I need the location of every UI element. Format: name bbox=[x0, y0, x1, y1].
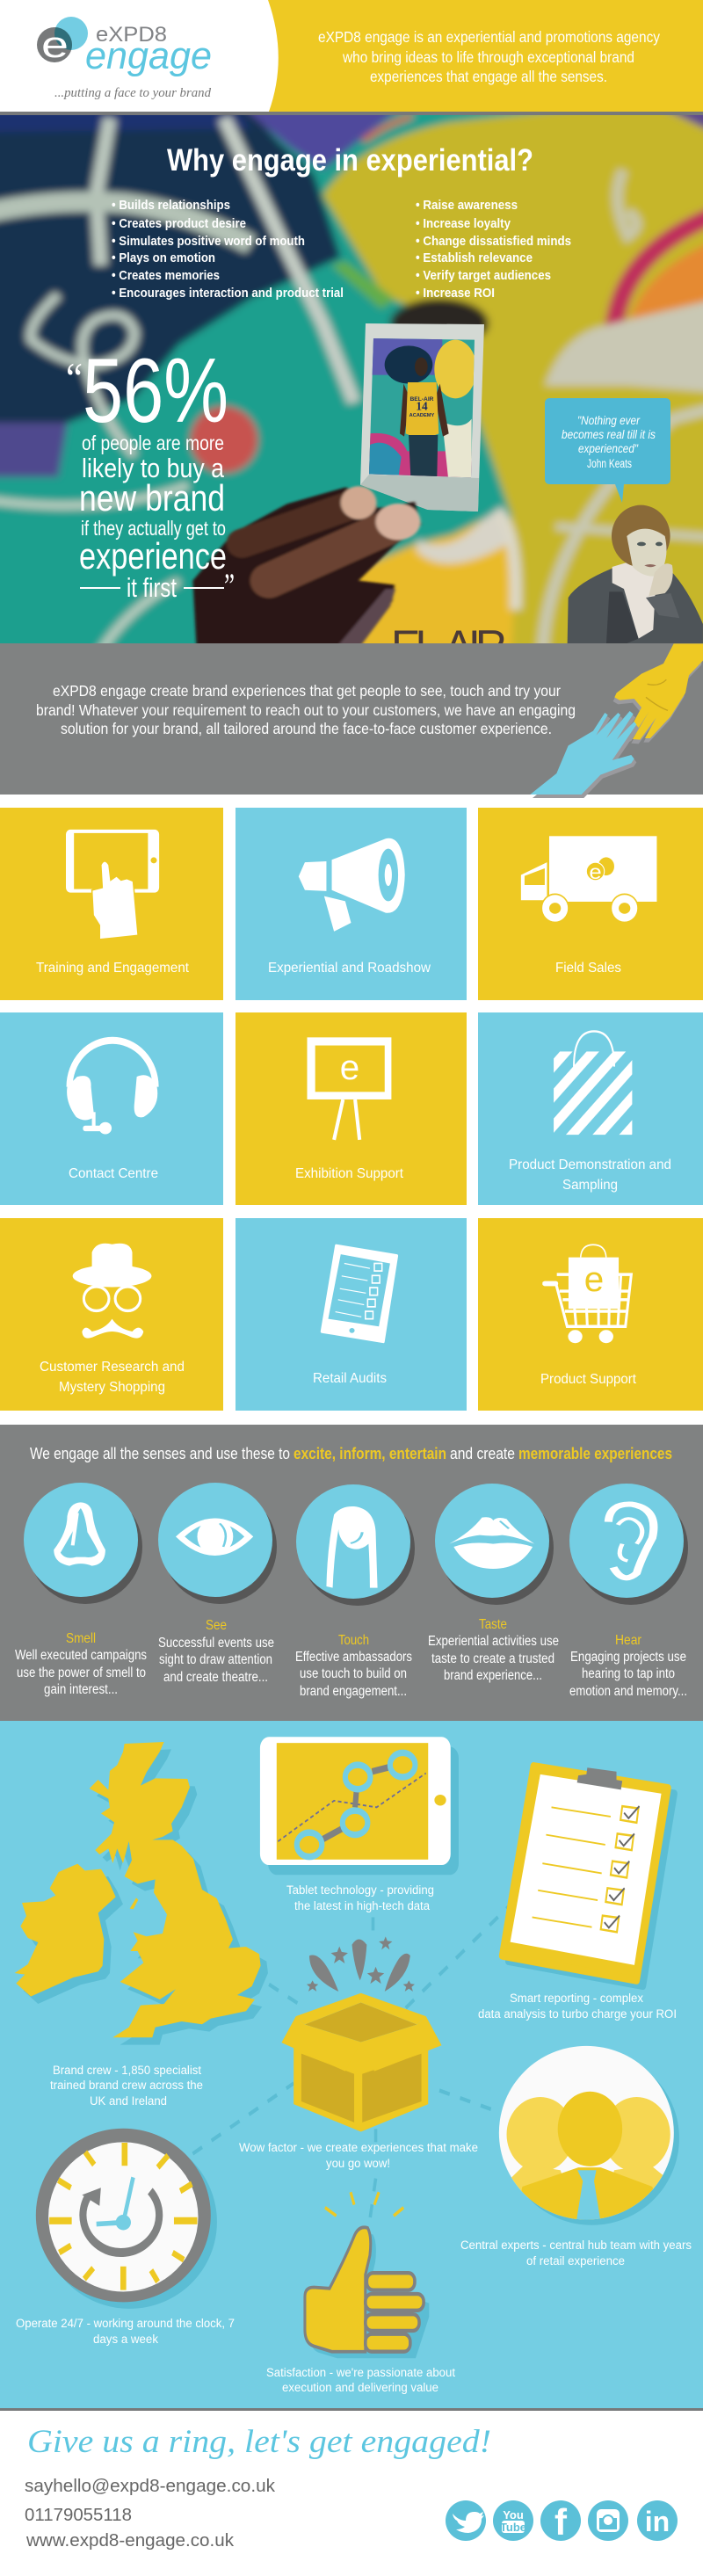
56 percent statistic: of people are more bbox=[82, 432, 224, 454]
bullet list: left bbox=[112, 198, 344, 301]
speech bubble: John Keats quote bbox=[545, 398, 670, 503]
sense: smell: use the power of smell to bbox=[17, 1665, 146, 1680]
panel: retail audits bbox=[236, 1218, 467, 1411]
sense: taste: Taste bbox=[479, 1617, 507, 1632]
icon: tablet with data chart bbox=[260, 1737, 459, 1875]
hand holding polaroid bbox=[192, 486, 422, 664]
intro paragraph: solution for your brand, all tailored around the face-to-face customer experience. bbox=[61, 720, 552, 737]
sense: see: See bbox=[206, 1618, 227, 1633]
capabilities panel background bbox=[0, 1721, 703, 2411]
wow factor caption bbox=[239, 2141, 478, 2170]
central experts caption: of retail experience bbox=[526, 2254, 625, 2268]
brand crew caption: trained brand crew across the bbox=[50, 2079, 203, 2092]
sense: hear bbox=[569, 1484, 688, 1699]
icon: central experts team bbox=[499, 2046, 679, 2225]
icon: presentation board: e bbox=[340, 1049, 359, 1088]
panel: product demonstration and sampling bbox=[478, 1012, 703, 1205]
panel: product demonstration and sampling: Product Demonstration and bbox=[509, 1157, 671, 1172]
icon: lips bbox=[449, 1517, 534, 1569]
icon: youtube bbox=[493, 2500, 533, 2541]
senses heading: and create bbox=[450, 1444, 515, 1462]
panel: customer research and mystery shopping: Mystery Shopping bbox=[59, 1380, 165, 1395]
central experts caption: Central experts - central hub team with years bbox=[460, 2239, 692, 2252]
sense: smell: Well executed campaigns bbox=[15, 1648, 147, 1663]
sense: see: and create theatre... bbox=[163, 1670, 268, 1685]
brand crew caption bbox=[50, 2064, 203, 2108]
icon: UK and Ireland map bbox=[15, 1742, 268, 2045]
icon: nose bbox=[54, 1502, 105, 1566]
icon: facebook bbox=[540, 2500, 581, 2543]
panel: training and engagement bbox=[0, 808, 223, 1000]
panel: experiential and roadshow bbox=[236, 808, 467, 1000]
bullet list: left: • Creates memories bbox=[112, 268, 220, 283]
speech bubble: John Keats quote: John Keats bbox=[587, 457, 632, 470]
connecting dashes bbox=[192, 1906, 509, 2220]
speech bubble: John Keats quote: "Nothing ever bbox=[577, 414, 640, 427]
sense: touch: brand engagement... bbox=[300, 1684, 407, 1699]
satisfaction caption: execution and delivering value bbox=[282, 2381, 438, 2394]
sense: smell: gain interest... bbox=[44, 1682, 118, 1697]
icon: 24/7 clock bbox=[36, 2129, 217, 2309]
sense: see: Successful events use bbox=[158, 1636, 274, 1651]
tablet caption: the latest in high-tech data bbox=[294, 1899, 430, 1912]
bullet list: left: • Creates product desire bbox=[112, 216, 246, 231]
header intro text bbox=[318, 28, 660, 85]
panel: contact centre bbox=[0, 1012, 223, 1205]
icon: megaphone bbox=[299, 838, 405, 932]
Keats portrait bbox=[568, 505, 703, 643]
intro paragraph: eXPD8 engage create brand experiences that get people to see, touch and try your bbox=[53, 682, 561, 700]
header intro text: who bring ideas to life through exceptional brand bbox=[342, 48, 634, 66]
sense: touch: use touch to build on bbox=[300, 1666, 407, 1681]
56 percent statistic: if they actually get to bbox=[81, 517, 226, 540]
senses heading: memorable experiences bbox=[518, 1444, 672, 1462]
56 percent statistic: 56% bbox=[83, 340, 228, 442]
wow factor caption: Wow factor - we create experiences that make bbox=[239, 2141, 478, 2154]
smart reporting caption bbox=[478, 1992, 677, 2021]
panel: training and engagement: Training and Engagement bbox=[36, 961, 190, 976]
call to action heading: Give us a ring, let's get engaged! bbox=[27, 2424, 491, 2460]
header intro text: experiences that engage all the senses. bbox=[370, 68, 607, 85]
56 percent statistic bbox=[66, 340, 235, 606]
sense: taste: taste to create a trusted bbox=[431, 1651, 554, 1666]
smart reporting caption: data analysis to turbo charge your ROI bbox=[478, 2007, 677, 2021]
senses heading: excite, inform, entertain bbox=[294, 1444, 446, 1462]
icon: ear bbox=[608, 1505, 654, 1578]
sense: taste: Experiential activities use bbox=[428, 1634, 559, 1649]
panel: exhibition support bbox=[236, 1012, 467, 1205]
panel: contact centre: Contact Centre bbox=[69, 1166, 158, 1181]
sense: smell: Smell bbox=[66, 1631, 96, 1646]
logo bbox=[37, 17, 212, 100]
panel: field sales bbox=[478, 808, 703, 1000]
panel: customer research and mystery shopping: Customer Research and bbox=[40, 1360, 185, 1375]
operate 24/7 caption: days a week bbox=[93, 2333, 158, 2346]
bullet list: right: • Increase loyalty bbox=[416, 216, 511, 231]
bullet list: left: • Plays on emotion bbox=[112, 250, 215, 265]
header intro text: eXPD8 engage is an experiential and promotions agency bbox=[318, 28, 660, 46]
icon: reaching hands bbox=[530, 643, 703, 798]
sense: hear: Engaging projects use bbox=[570, 1650, 686, 1665]
56 percent statistic: new brand bbox=[79, 477, 225, 519]
icon: fingertip bbox=[326, 1506, 378, 1588]
icon: clipboard checklist bbox=[502, 1766, 674, 1986]
operate 24/7 caption: Operate 24/7 - working around the clock, 7 bbox=[16, 2317, 235, 2330]
panel: experiential and roadshow: Experiential and Roadshow bbox=[268, 961, 431, 976]
central experts caption bbox=[460, 2239, 692, 2268]
brand crew caption: Brand crew - 1,850 specialist bbox=[53, 2064, 201, 2077]
icon: thumbs up bbox=[305, 2192, 429, 2358]
intro paragraph bbox=[36, 682, 576, 737]
social icons bbox=[446, 2500, 678, 2543]
bullet list: left: • Simulates positive word of mouth bbox=[112, 234, 305, 249]
bullet list: right bbox=[416, 198, 571, 301]
bullet list: right: • Raise awareness bbox=[416, 198, 518, 213]
contact details: sayhello@expd8-engage.co.uk bbox=[25, 2476, 276, 2496]
panel: retail audits: Retail Audits bbox=[313, 1371, 387, 1386]
grey band bbox=[0, 643, 703, 795]
sense: touch: Touch bbox=[338, 1633, 369, 1648]
sense: touch: Effective ambassadors bbox=[295, 1650, 412, 1665]
sense: smell bbox=[15, 1483, 147, 1697]
bullet list: left: • Builds relationships bbox=[112, 198, 230, 213]
icon: tablet touch bbox=[66, 830, 159, 940]
intro paragraph: brand! Whatever your requirement to reach out to your customers, we have an engaging bbox=[36, 701, 576, 719]
56 percent statistic: experience bbox=[79, 535, 227, 577]
icon: open box with burst bbox=[281, 1936, 442, 2131]
panel: product demonstration and sampling: Sampling bbox=[562, 1178, 618, 1193]
icon: linkedin bbox=[637, 2500, 678, 2541]
icon: audit tablet bbox=[322, 1245, 397, 1341]
icon: facebook: f bbox=[554, 2501, 568, 2543]
bullet list: right: • Verify target audiences bbox=[416, 268, 551, 283]
heading: why engage: Why engage in experiential? bbox=[167, 143, 533, 178]
icon: instagram bbox=[588, 2500, 628, 2541]
icon: delivery truck bbox=[521, 836, 656, 922]
jersey lettering: EL-AIR bbox=[391, 621, 507, 671]
sense: touch bbox=[295, 1484, 415, 1699]
contact details bbox=[25, 2476, 276, 2551]
icon: presentation board bbox=[307, 1037, 391, 1140]
sense: hear: hearing to tap into bbox=[582, 1666, 675, 1681]
icon: youtube: You bbox=[503, 2508, 524, 2522]
56 percent statistic: ” bbox=[224, 566, 235, 606]
satisfaction caption bbox=[266, 2366, 455, 2394]
icon: linkedin: in bbox=[645, 2506, 670, 2537]
icon: detective face bbox=[73, 1244, 151, 1339]
bullet list: right: • Increase ROI bbox=[416, 286, 495, 301]
senses heading bbox=[30, 1444, 672, 1462]
logo: engage bbox=[85, 34, 212, 77]
logo: ...putting a face to your brand bbox=[54, 86, 211, 100]
polaroid photo: BEL-AIR bbox=[409, 396, 434, 403]
icon: headset bbox=[67, 1041, 157, 1135]
icon: youtube: Tube bbox=[500, 2521, 526, 2534]
speech bubble: John Keats quote: becomes real till it is bbox=[562, 428, 656, 441]
icon: eye bbox=[176, 1518, 253, 1556]
sense: hear: Hear bbox=[615, 1633, 642, 1648]
logo: e bbox=[41, 24, 69, 65]
tablet caption: Tablet technology - providing bbox=[286, 1883, 434, 1897]
panel: product support bbox=[478, 1218, 703, 1411]
senses panel background bbox=[0, 1425, 703, 1721]
56 percent statistic: likely to buy a bbox=[82, 453, 225, 483]
panel: field sales: Field Sales bbox=[555, 961, 621, 976]
polaroid photo bbox=[360, 323, 484, 512]
operate 24/7 caption bbox=[16, 2317, 235, 2346]
sense: see bbox=[158, 1483, 277, 1685]
icon: delivery truck: e bbox=[589, 860, 602, 883]
56 percent statistic: “ bbox=[66, 353, 83, 403]
icon: shopping cart bbox=[542, 1244, 631, 1343]
sense: see: sight to draw attention bbox=[159, 1652, 272, 1667]
brand crew caption: UK and Ireland bbox=[90, 2094, 167, 2108]
panel: product support: Product Support bbox=[540, 1372, 637, 1387]
bullet list: right: • Establish relevance bbox=[416, 250, 533, 265]
tablet caption bbox=[286, 1883, 434, 1912]
speech bubble: John Keats quote: experienced" bbox=[578, 442, 639, 455]
smart reporting caption: Smart reporting - complex bbox=[510, 1992, 643, 2005]
logo: eXPD8 bbox=[96, 23, 167, 47]
contact details: www.expd8-engage.co.uk bbox=[25, 2530, 235, 2551]
header band bbox=[0, 0, 703, 115]
sense: taste bbox=[428, 1484, 559, 1683]
satisfaction caption: Satisfaction - we're passionate about bbox=[266, 2366, 455, 2379]
panel: customer research and mystery shopping bbox=[0, 1218, 223, 1411]
polaroid photo: 14 bbox=[416, 400, 428, 413]
senses heading: We engage all the senses and use these to bbox=[30, 1444, 290, 1462]
bullet list: right: • Change dissatisfied minds bbox=[416, 234, 571, 249]
sense: taste: brand experience... bbox=[444, 1668, 542, 1683]
bullet list: left: • Encourages interaction and product trial bbox=[112, 286, 344, 301]
icon: twitter bbox=[446, 2500, 486, 2541]
wow factor caption: you go wow! bbox=[326, 2157, 390, 2170]
56 percent statistic: it first bbox=[127, 572, 177, 603]
panel: exhibition support: Exhibition Support bbox=[295, 1166, 404, 1181]
photo background: mural with hand bbox=[0, 91, 703, 671]
icon: shopping cart: e bbox=[584, 1260, 604, 1300]
polaroid photo: ACADEMY bbox=[409, 413, 435, 418]
icon: striped shopping bag bbox=[554, 1031, 632, 1135]
contact details: 01179055118 bbox=[25, 2505, 132, 2525]
